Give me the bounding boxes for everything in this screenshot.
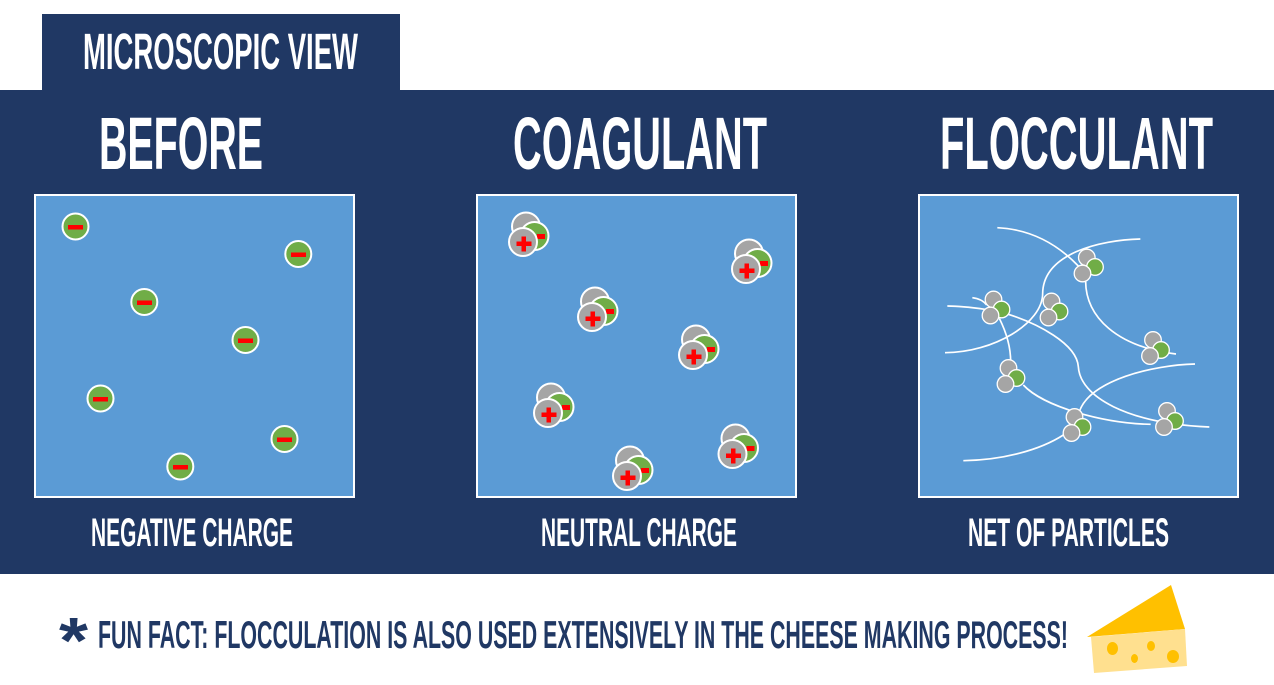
caption: neutral charge: NEUTRAL CHARGE — [541, 511, 737, 555]
icon: cheese — [1087, 585, 1187, 673]
heading: coagulant: COAGULANT — [513, 102, 767, 185]
panel: flocculant — [919, 102, 1238, 555]
header tab — [42, 14, 400, 91]
header tab: MICROSCOPIC VIEW — [83, 23, 358, 80]
fun fact — [59, 604, 1068, 677]
icon: asterisk: * — [59, 604, 89, 677]
box: negatively charged particles — [35, 195, 354, 497]
box: net of particles — [919, 195, 1238, 497]
heading: before: BEFORE — [99, 102, 263, 185]
panel: before — [35, 102, 354, 555]
caption: negative charge: NEGATIVE CHARGE — [91, 511, 293, 555]
main navy band — [0, 90, 1274, 574]
box: neutralised clusters — [477, 195, 796, 497]
panel: coagulant — [477, 102, 796, 555]
